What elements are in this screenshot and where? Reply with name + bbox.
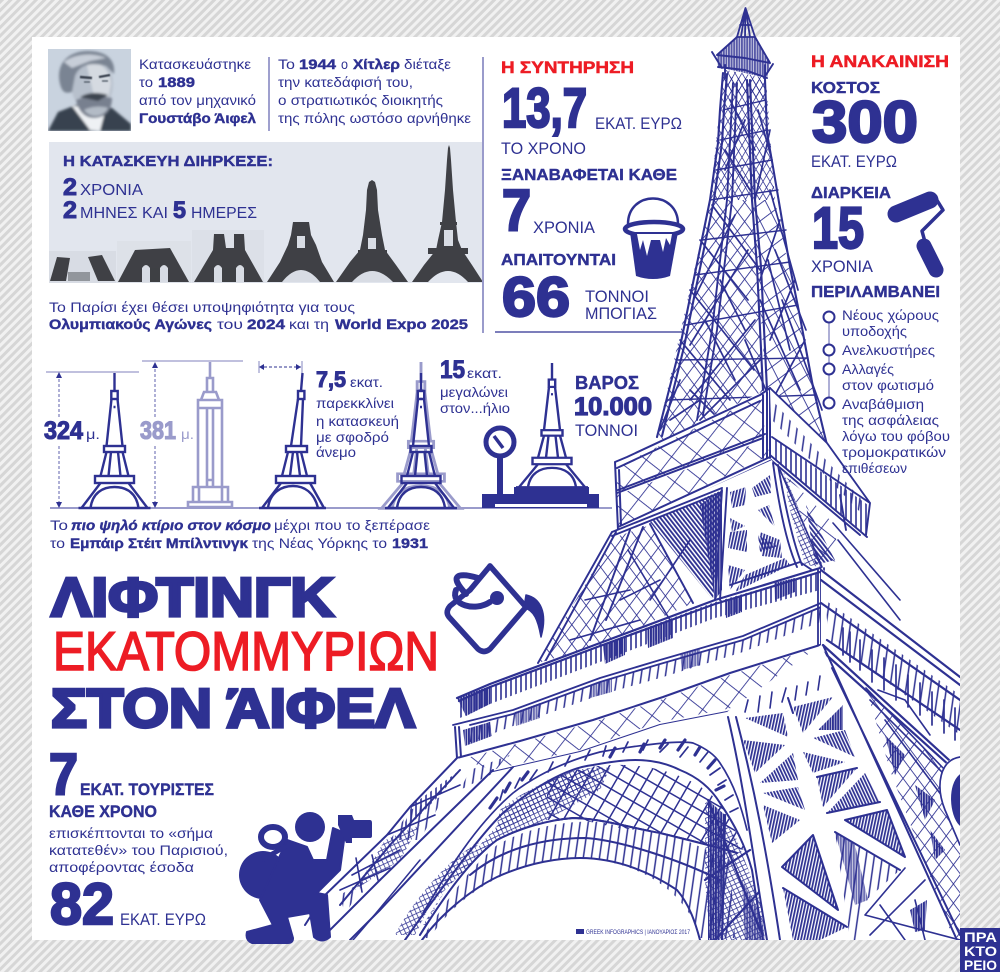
expanding tower 15 cm: εκατ. <box>467 365 502 381</box>
portrait of Gustave Eiffel <box>48 49 131 131</box>
Paris candidacy text: Το Παρίσι έχει θέσει υποψηφιότητα για τους <box>49 299 355 315</box>
arch lattice <box>395 765 746 940</box>
icon: tipping paint bucket <box>447 566 544 652</box>
top left panel: Eiffel bio <box>48 49 471 131</box>
expanding tower 15 cm: στον...ήλιο <box>440 400 510 416</box>
stat: 7 million tourists: 7 <box>49 742 78 807</box>
tourists description <box>49 825 228 875</box>
right side of second platform <box>770 388 870 537</box>
right edge lattice <box>866 688 960 940</box>
panel: construction duration <box>49 142 483 283</box>
scale with tower: weight 10,000 tons: ΤΟΝΝΟΙ <box>575 421 638 440</box>
included works list: της ασφάλειας <box>842 412 939 428</box>
leaning tower 7.5 cm: η κατασκευή <box>316 413 399 429</box>
Hitler order text: ο στρατιωτικός διοικητής <box>278 92 443 108</box>
expanding tower 15 cm <box>378 356 510 508</box>
stat: 82 million euros: ΕΚΑΤ. ΕΥΡΩ <box>120 910 206 929</box>
Paris candidacy text: και τη <box>289 316 329 332</box>
icon: kneeling tourist photographer <box>239 812 372 943</box>
panel: tourists <box>49 742 372 943</box>
height 324 m: μ. <box>86 426 100 442</box>
stat: duration 15 years: ΔΙΑΡΚΕΙΑ <box>811 185 891 202</box>
duration figures: ΗΜΕΡΕΣ <box>191 205 257 222</box>
second platform <box>615 388 772 532</box>
stat: 13,7 million a year <box>501 76 682 158</box>
stat: repainted every 7 years <box>501 167 677 243</box>
pillar section between platforms <box>538 460 900 663</box>
included works list: λόγω του φόβου <box>842 428 950 444</box>
stat: cost 300 million <box>811 80 918 171</box>
left pillar <box>300 755 513 940</box>
height 381 m Empire State <box>140 361 243 508</box>
main title: ΕΚΑΤΟΜΜΥΡΙΩΝ <box>53 620 439 682</box>
divider <box>268 57 270 131</box>
stat: 66 tons of paint: ΑΠΑΙΤΟΥΝΤΑΙ <box>501 252 616 269</box>
column divider <box>482 57 484 333</box>
logo: Praktoreio <box>960 928 1000 972</box>
height 381 m Empire State: μ. <box>181 426 194 442</box>
main title: ΛΙΦΤΙΝΓΚ <box>51 566 334 628</box>
duration figures: 2 <box>63 197 77 224</box>
Paris candidacy text <box>49 299 468 332</box>
included works list: στον φωτισμό <box>842 377 934 393</box>
leaning tower 7.5 cm: άνεμο <box>316 444 356 460</box>
Hitler order text: την κατεδάφισή του, <box>278 74 413 90</box>
stat: cost 300 million: ΕΚΑΤ. ΕΥΡΩ <box>811 152 897 171</box>
panel: maintenance <box>495 58 683 332</box>
stat: repainted every 7 years: ΧΡΟΝΙΑ <box>533 218 596 237</box>
first platform lattice band <box>455 645 832 778</box>
included works list: Ανελκυστήρες <box>842 342 935 358</box>
stat: duration 15 years: ΧΡΟΝΙΑ <box>811 257 874 276</box>
Hitler order text: Χίτλερ <box>353 56 400 72</box>
leaning tower 7.5 cm: εκατ. <box>350 374 383 390</box>
heading: renovation: Η ΑΝΑΚΑΙΝΙΣΗ <box>811 52 949 71</box>
leaning tower 7.5 cm: 7,5 <box>316 367 346 392</box>
Hitler order text: ο <box>341 56 348 72</box>
tourists description: κατατεθέν» του Παρισιού, <box>49 842 228 858</box>
panel: tower facts row <box>44 356 652 508</box>
height 324 m: 324 <box>44 417 83 445</box>
included works list: τρομοκρατικών <box>842 444 946 460</box>
caption: tallest building: πιο ψηλό κτίριο στον κόσμο <box>71 517 271 533</box>
caption: tallest building: 1931 <box>392 535 428 551</box>
icon: paint roller <box>896 197 943 270</box>
stat: duration 15 years: 15 <box>812 196 864 261</box>
tower top cap and spire <box>712 8 773 100</box>
included works list: Αναβάθμιση <box>842 396 924 412</box>
Hitler order text: 1944 <box>299 56 336 72</box>
logo: Praktoreio: ΠΡΑ <box>964 929 997 945</box>
expanding tower 15 cm: μεγαλώνει <box>440 384 508 400</box>
tower mast lattice <box>655 73 827 445</box>
stat: duration 15 years <box>811 185 891 276</box>
tourists description: επισκέπτονται το «σήμα <box>49 825 213 841</box>
credit line: GREEK INFOGRAPHICS | ΙΑΝΟΥΑΡΙΟΣ 2017 <box>586 930 691 936</box>
stat: 7 million tourists: ΚΑΘΕ ΧΡΟΝΟ <box>49 802 157 821</box>
duration figures: ΜΗΝΕΣ ΚΑΙ <box>80 205 168 222</box>
includes heading: ΠΕΡΙΛΑΜΒΑΝΕΙ <box>811 284 940 301</box>
stat: 7 million tourists <box>49 742 214 821</box>
stat: 13,7 million a year: ΤΟ ΧΡΟΝΟ <box>501 139 586 158</box>
stat: 7 million tourists: ΕΚΑΤ. ΤΟΥΡΙΣΤΕΣ <box>80 780 214 799</box>
caption: tallest building <box>50 517 430 551</box>
Paris candidacy text: 2024 <box>247 316 285 332</box>
caption: tallest building: Εμπάιρ Στέιτ Μπίλντινγκ <box>70 535 248 551</box>
construction date text <box>139 56 256 126</box>
duration figures: 5 <box>173 197 186 224</box>
expanding tower 15 cm: 15 <box>440 356 465 384</box>
stat: 82 million euros <box>50 872 206 937</box>
construction date text: Κατασκευάστηκε <box>139 56 251 72</box>
heading: construction lasted: Η ΚΑΤΑΣΚΕΥΗ ΔΙΗΡΚΕΣΕ: <box>63 153 273 170</box>
leaning tower 7.5 cm: με σφοδρό <box>316 429 389 445</box>
stat: repainted every 7 years: ΞΑΝΑΒΑΦΕΤΑΙ ΚΑΘΕ <box>501 167 677 184</box>
construction date text: Γουστάβο Άιφελ <box>139 110 256 126</box>
right pillar with cross bracing <box>727 645 960 940</box>
caption: tallest building: μέχρι που το ξεπέρασε <box>274 517 430 533</box>
stat: 66 tons of paint: ΤΟΝΝΟΙ <box>585 287 649 306</box>
Eiffel tower sketch illustration <box>300 8 960 940</box>
photo strip of construction stages <box>49 145 483 283</box>
stat: 82 million euros: 82 <box>50 872 114 937</box>
stat: 13,7 million a year: 13,7 <box>502 76 587 139</box>
duration figures: ΧΡΟΝΙΑ <box>80 182 143 199</box>
stat: 66 tons of paint: 66 <box>502 265 570 328</box>
stat: 13,7 million a year: ΕΚΑΤ. ΕΥΡΩ <box>595 114 682 133</box>
arch corner dense hatching <box>705 800 770 940</box>
arch decorative rings <box>404 712 764 940</box>
main title <box>51 566 439 739</box>
included works list <box>824 307 950 476</box>
Hitler order text: Το <box>278 56 295 72</box>
height 381 m Empire State: 381 <box>140 417 176 445</box>
stat: 66 tons of paint <box>501 252 657 328</box>
included works list: Αλλαγές <box>842 361 894 377</box>
stat: 66 tons of paint: ΜΠΟΓΙΑΣ <box>585 304 657 323</box>
included works list: υποδοχής <box>842 323 907 339</box>
construction date text: 1889 <box>158 74 195 90</box>
scale with tower: weight 10,000 tons: ΒΑΡΟΣ <box>575 373 639 393</box>
right upper railing of first platform <box>821 568 960 775</box>
caption: tallest building: της Νέας Υόρκης το <box>252 535 387 551</box>
height 324 m <box>44 372 150 508</box>
panel: renovation <box>811 52 950 476</box>
leaning tower 7.5 cm: παρεκκλίνει <box>316 395 394 411</box>
included works list: Νέους χώρους <box>842 307 939 323</box>
scale with tower: weight 10,000 tons: 10.000 <box>574 393 652 421</box>
stat: cost 300 million: ΚΟΣΤΟΣ <box>811 80 880 97</box>
icon: paint bucket <box>625 198 683 279</box>
Paris candidacy text: World Expo 2025 <box>335 316 468 332</box>
tourists description: αποφέροντας έσοδα <box>49 859 194 875</box>
main title: ΣΤΟΝ ΆΙΦΕΛ <box>51 677 415 739</box>
included works list: επιθέσεων <box>842 460 907 476</box>
Hitler order text: διέταξε <box>404 56 451 72</box>
construction date text: το <box>139 74 153 90</box>
duration figures <box>63 174 257 224</box>
caption: tallest building: Το <box>50 517 68 533</box>
Paris candidacy text: Ολυμπιακούς Αγώνες <box>49 316 212 332</box>
Paris candidacy text: του <box>217 316 243 332</box>
logo: Praktoreio: ΚΤΟ <box>964 943 997 959</box>
duration figures: 2 <box>63 174 77 201</box>
scale with tower: weight 10,000 tons <box>482 363 652 508</box>
Hitler order text <box>278 56 471 126</box>
leaning tower 7.5 cm <box>259 361 399 508</box>
heading: maintenance: Η ΣΥΝΤΗΡΗΣΗ <box>501 58 634 77</box>
credit line <box>576 929 691 936</box>
construction date text: από τον μηχανικό <box>139 92 256 108</box>
first platform upper rail with hanging ticks <box>453 568 824 760</box>
stat: repainted every 7 years: 7 <box>502 178 531 243</box>
stat: cost 300 million: 300 <box>812 90 918 155</box>
Hitler order text: της πόλης ωστόσο αρνήθηκε <box>278 110 471 126</box>
caption: tallest building: το <box>50 535 65 551</box>
